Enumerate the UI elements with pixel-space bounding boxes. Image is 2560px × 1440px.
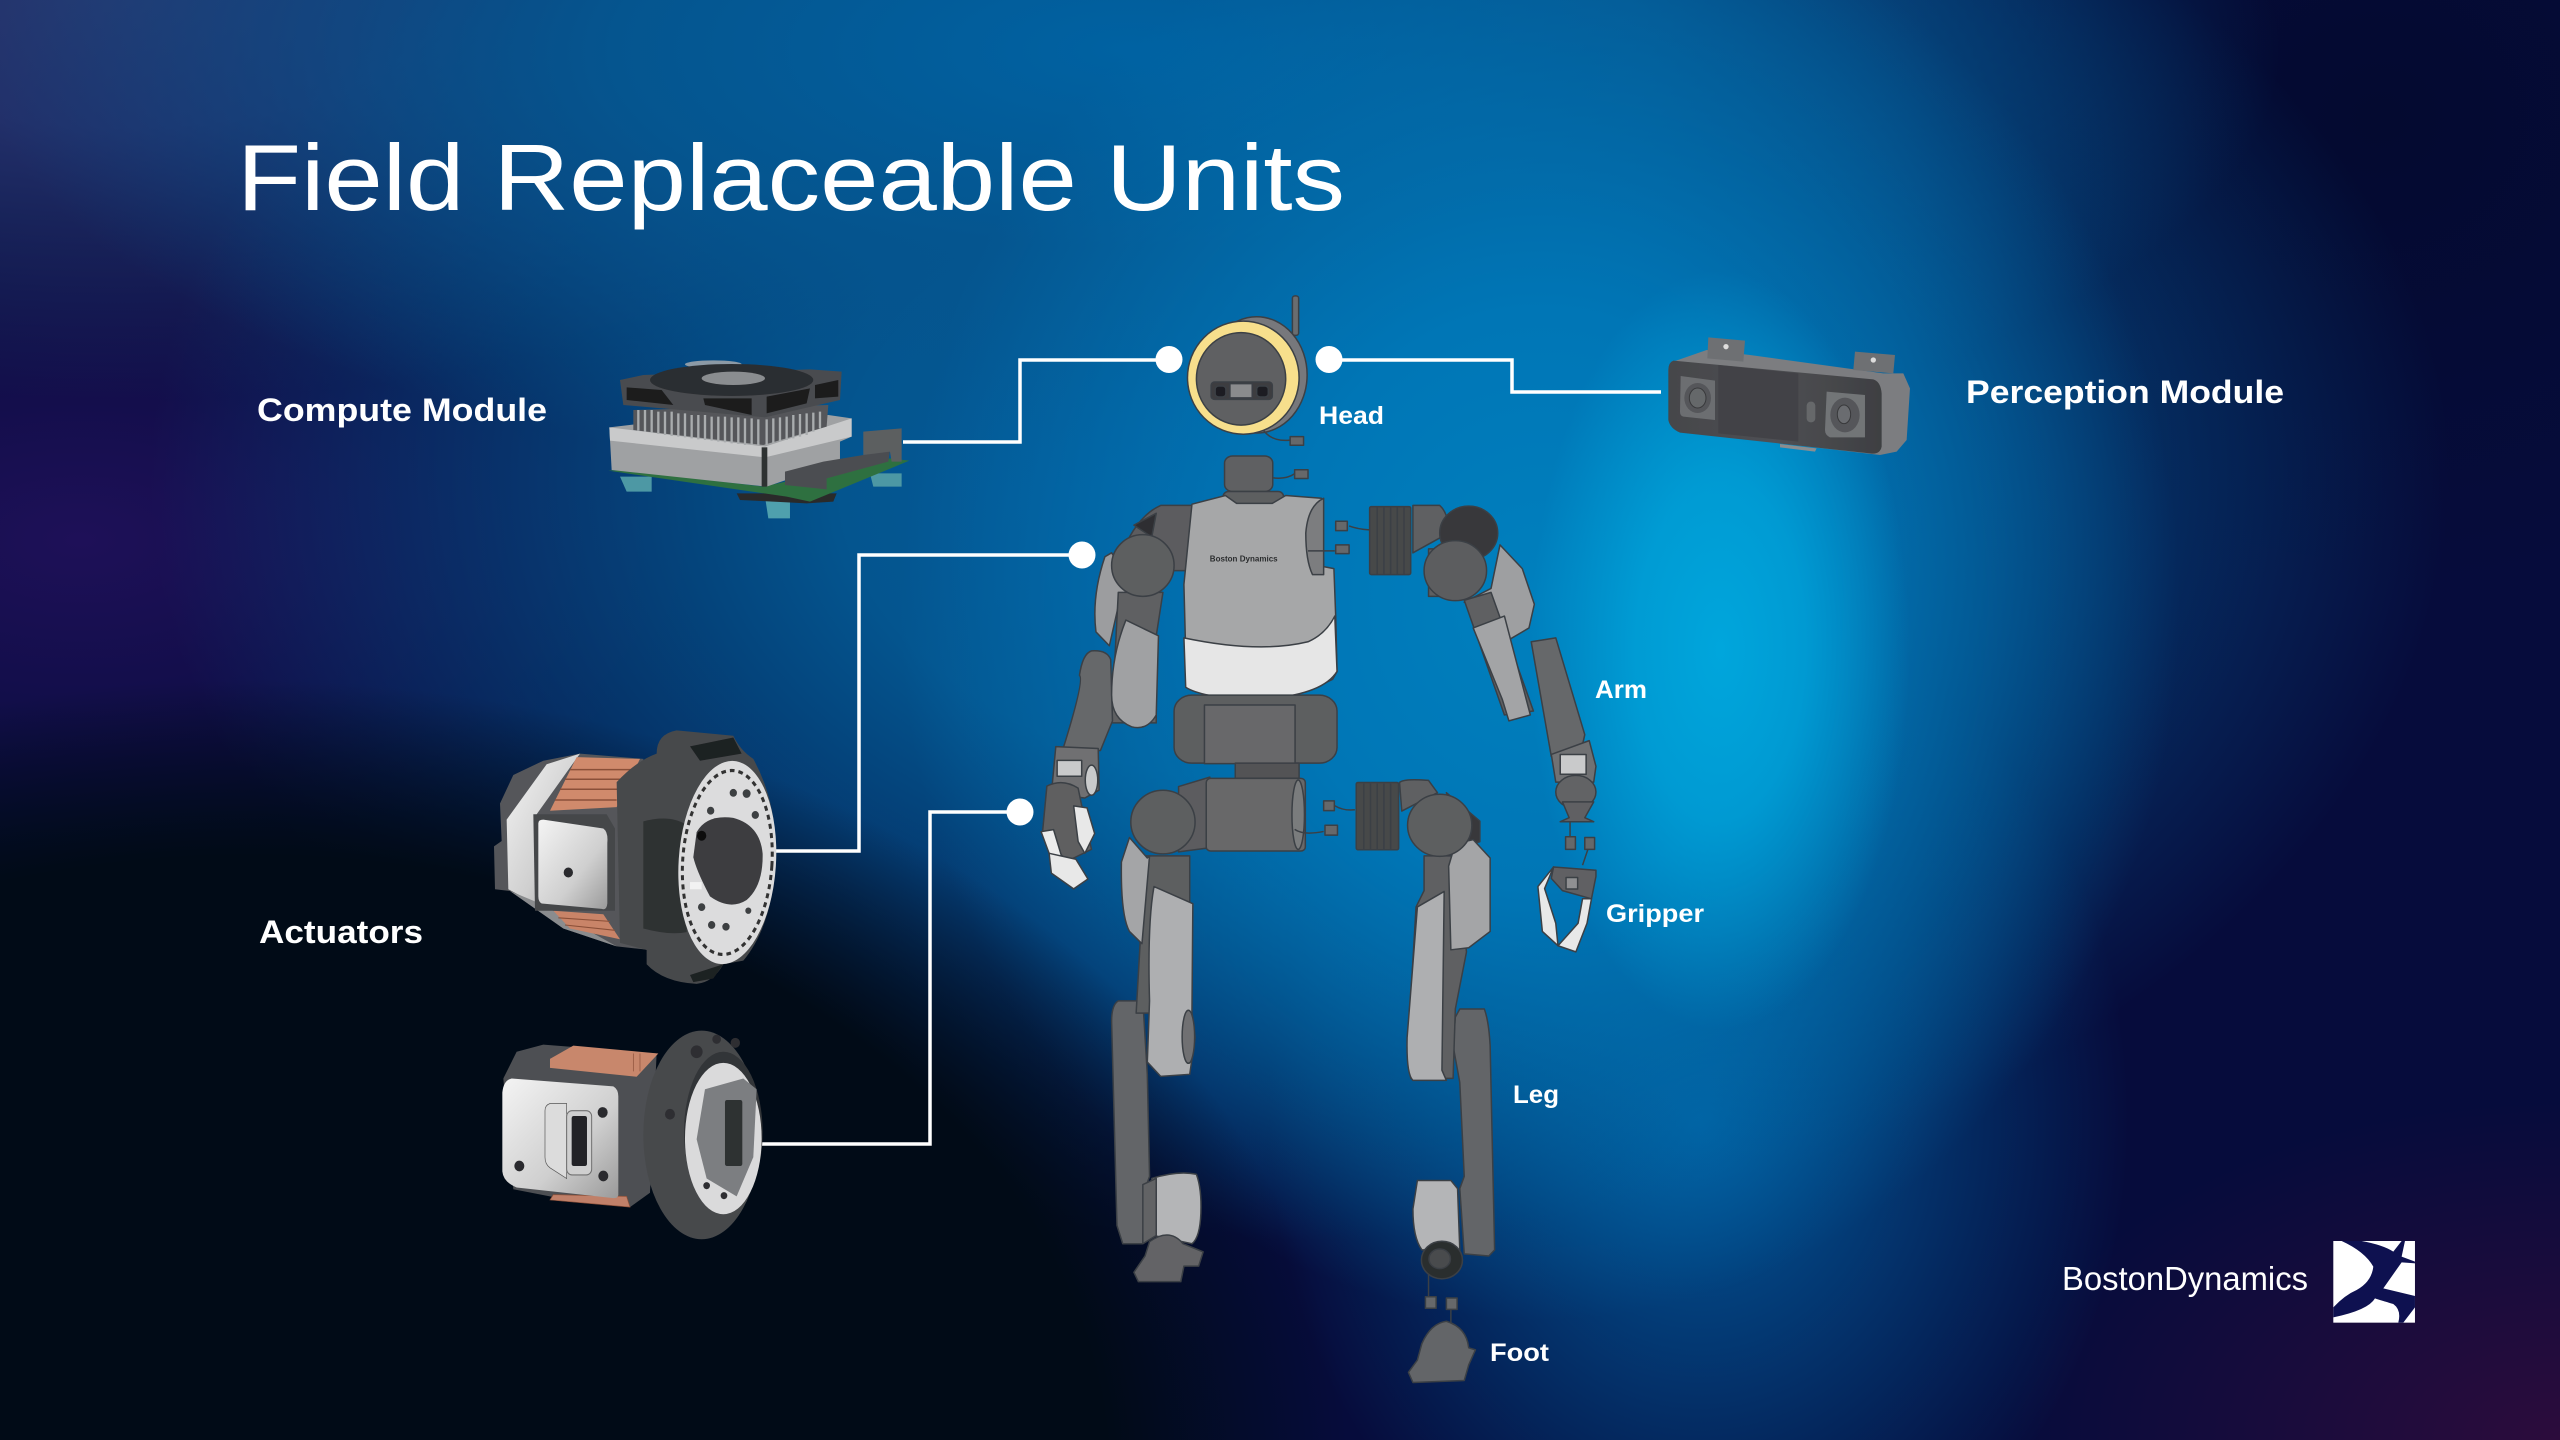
head [1187, 296, 1307, 445]
connector: upper actuator to shoulder [776, 542, 1096, 851]
rear body [503, 1045, 657, 1207]
compute module [608, 360, 909, 518]
connector port [567, 1111, 592, 1175]
neck [1223, 456, 1308, 504]
copper windings [550, 757, 640, 939]
robot torso and left side [1041, 296, 1349, 889]
pelvis [1174, 695, 1337, 778]
rear body [494, 754, 650, 950]
heat sink fins [633, 405, 828, 445]
left hip [1179, 777, 1355, 852]
forearm [1531, 638, 1585, 756]
shoulder actuator fins [1370, 507, 1411, 575]
label: compute module: Compute Module [257, 392, 547, 428]
right lens [1825, 392, 1865, 437]
torso [1184, 495, 1349, 700]
brand logo [2333, 1241, 2415, 1323]
perception module [1668, 337, 1910, 455]
label: head: Head [1319, 402, 1384, 430]
right foot [1408, 1321, 1475, 1383]
label: actuators: Actuators [259, 914, 423, 950]
right thigh [1407, 794, 1490, 1080]
connector: lower actuator to wrist [762, 798, 1034, 1144]
connector riser [785, 451, 890, 489]
chrome band [507, 754, 580, 904]
torso: Boston Dynamics [1210, 554, 1278, 563]
right leg actuator [1356, 780, 1480, 850]
copper bar [550, 1046, 658, 1207]
output flange [672, 757, 782, 968]
wrist cables [1570, 822, 1589, 865]
left foot and ankle [1134, 1173, 1203, 1282]
right ankle [1413, 1180, 1462, 1279]
standoffs [620, 473, 902, 518]
left lower leg [1112, 1001, 1150, 1244]
left shoulder back [1129, 505, 1192, 571]
circuit board [608, 458, 909, 502]
flange [643, 1031, 760, 1239]
mounting tabs [1707, 337, 1895, 373]
upper arm [1464, 592, 1533, 715]
left hand [1041, 747, 1099, 889]
foot cables [1429, 1274, 1451, 1325]
left thigh [1121, 790, 1195, 1076]
upper actuator [494, 730, 782, 984]
robot hips and legs [1112, 777, 1596, 1383]
right lower leg [1453, 1009, 1495, 1256]
label: gripper: Gripper [1606, 900, 1704, 928]
label: foot: Foot [1490, 1339, 1550, 1367]
lower actuator [502, 1031, 763, 1239]
left arm [1062, 535, 1174, 751]
title: Field Replaceable Units [237, 125, 1345, 230]
gripper [1538, 867, 1596, 952]
chrome plate [502, 1079, 618, 1198]
label: perception module: Perception Module [1966, 374, 2284, 410]
arm cables [1349, 526, 1370, 530]
label: leg: Leg [1513, 1081, 1559, 1109]
left lens [1680, 376, 1715, 420]
label: arm: Arm [1595, 676, 1647, 704]
motor housing [617, 730, 776, 984]
connector: head to perception module [1316, 346, 1661, 392]
robot right arm [1349, 505, 1596, 865]
fan frame [620, 369, 842, 417]
status light [1807, 402, 1815, 422]
housing [1668, 350, 1910, 455]
connector: compute module to head [903, 346, 1182, 442]
shoulder block [1413, 505, 1449, 553]
wrist [1551, 741, 1596, 782]
side plate [533, 814, 615, 911]
heat sink base [609, 415, 852, 487]
brand wordmark: BostonDynamics [2062, 1260, 2308, 1297]
